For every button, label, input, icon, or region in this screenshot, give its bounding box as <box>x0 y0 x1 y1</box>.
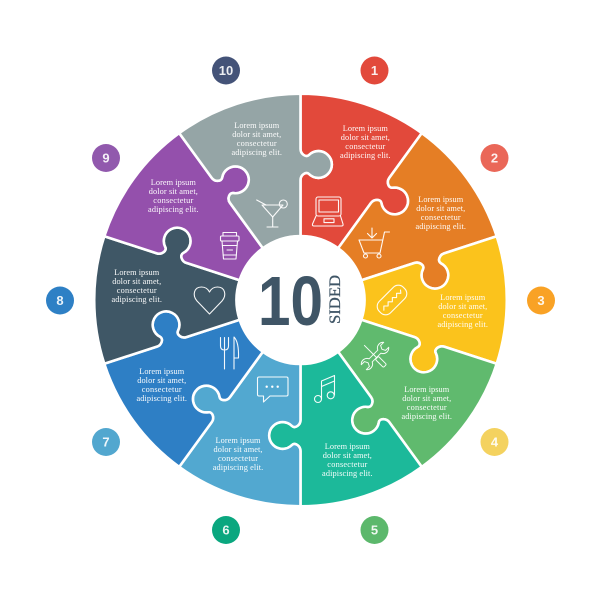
text block 7: Lorem ipsum <box>139 367 185 376</box>
text block 7: consectetur <box>142 385 182 394</box>
text block 3: consectetur <box>443 311 483 320</box>
text block 9: consectetur <box>153 196 194 205</box>
text block 4: adipiscing elit. <box>401 412 452 421</box>
badge 8: 8 <box>56 293 64 308</box>
panel: segment 1 red <box>300 94 422 248</box>
icon: cocktail <box>257 200 287 227</box>
badge 6: 6 <box>222 523 230 538</box>
text block 8: consectetur <box>117 286 157 295</box>
text block 3: Lorem ipsum <box>440 293 486 302</box>
icon: speech bubble <box>258 377 288 402</box>
icon: music notes <box>314 376 334 402</box>
icon: fork and knife <box>220 337 239 369</box>
icon: hot dog <box>374 282 410 318</box>
icon: wrench and screwdriver <box>360 341 390 371</box>
badge 8 <box>46 286 74 314</box>
text block 7: dolor sit amet, <box>137 376 186 385</box>
badge 5: 5 <box>371 523 378 538</box>
text block 3: adipiscing elit. <box>437 320 488 329</box>
text block 2: dolor sit amet, <box>416 204 465 213</box>
text block 9 <box>148 178 199 214</box>
text block 4: Lorem ipsum <box>404 385 450 394</box>
text block 1: adipiscing elit. <box>340 151 391 160</box>
icon: shopping cart <box>359 228 390 258</box>
badge 7: 7 <box>102 435 110 450</box>
text block 9: dolor sit amet, <box>149 187 198 196</box>
center title: 10 SIDED: SIDED <box>327 275 344 324</box>
icon: laptop <box>312 197 343 226</box>
text block 10: adipiscing elit. <box>231 148 282 157</box>
text block 3: dolor sit amet, <box>438 302 487 311</box>
badge 9 <box>92 144 120 172</box>
text block 8: adipiscing elit. <box>111 295 162 304</box>
icon: coffee cup <box>220 232 239 259</box>
badge 4: 4 <box>491 435 499 450</box>
center circle <box>236 235 366 365</box>
panel: segment 3 yellow <box>350 236 534 399</box>
text block 5: dolor sit amet, <box>323 451 372 460</box>
text block 6: Lorem ipsum <box>216 436 261 445</box>
text block 2: adipiscing elit. <box>415 222 466 231</box>
text block 4: dolor sit amet, <box>402 394 451 403</box>
panel: segment 6 light blue <box>179 352 300 506</box>
text block 8 <box>111 268 162 304</box>
badge 3 <box>527 286 555 314</box>
badge 1 <box>360 56 388 84</box>
text block 7: adipiscing elit. <box>136 394 187 403</box>
text block 7 <box>136 367 187 403</box>
badge 4 <box>480 428 508 456</box>
text block 10: Lorem ipsum <box>234 121 280 130</box>
text block 5: Lorem ipsum <box>325 442 370 451</box>
puzzle ring <box>67 62 534 538</box>
text block 4: consectetur <box>407 403 447 412</box>
text block 5 <box>322 442 373 478</box>
badge 3: 3 <box>537 293 545 308</box>
panel: segment 8 slate <box>67 201 251 364</box>
text block 8: Lorem ipsum <box>114 268 160 277</box>
badge 7 <box>92 428 120 456</box>
text block 1: dolor sit amet, <box>341 133 390 142</box>
text block 6: dolor sit amet, <box>214 445 262 454</box>
panel: segment 10 gray <box>179 62 368 258</box>
text block 5: adipiscing elit. <box>322 469 373 478</box>
text block 1: consectetur <box>345 142 386 151</box>
text block 6: consectetur <box>218 454 258 463</box>
badge 9: 9 <box>102 151 110 166</box>
panel: segment 9 purple <box>104 121 289 284</box>
badge 2 <box>480 144 508 172</box>
center title: 10 SIDED: 10 <box>258 262 323 340</box>
text block 10: consectetur <box>237 139 277 148</box>
text block 10 <box>231 121 282 157</box>
text block 2: consectetur <box>421 213 461 222</box>
text block 4 <box>401 385 452 421</box>
text block 10: dolor sit amet, <box>232 130 281 139</box>
text block 9: Lorem ipsum <box>151 178 196 187</box>
text block 6 <box>213 436 263 472</box>
icon: heart <box>194 287 225 314</box>
text block 6: adipiscing elit. <box>213 463 263 472</box>
badge 6 <box>212 516 240 544</box>
text block 1 <box>340 124 391 160</box>
text block 2: Lorem ipsum <box>418 195 464 204</box>
panel: segment 7 blue <box>81 271 270 467</box>
text block 9: adipiscing elit. <box>148 205 199 214</box>
badge 10 <box>212 56 240 84</box>
text block 2 <box>415 195 466 231</box>
text block 8: dolor sit amet, <box>112 277 161 286</box>
panel: segment 2 orange <box>331 133 520 329</box>
badge 5 <box>360 516 388 544</box>
panel: segment 5 teal <box>233 342 422 538</box>
badge 1: 1 <box>371 63 378 78</box>
badge 2: 2 <box>491 151 498 166</box>
text block 5: consectetur <box>327 460 368 469</box>
badge 10: 10 <box>219 63 233 78</box>
text block 3 <box>437 293 488 329</box>
text block 1: Lorem ipsum <box>343 124 388 133</box>
panel: segment 4 green <box>312 316 497 479</box>
